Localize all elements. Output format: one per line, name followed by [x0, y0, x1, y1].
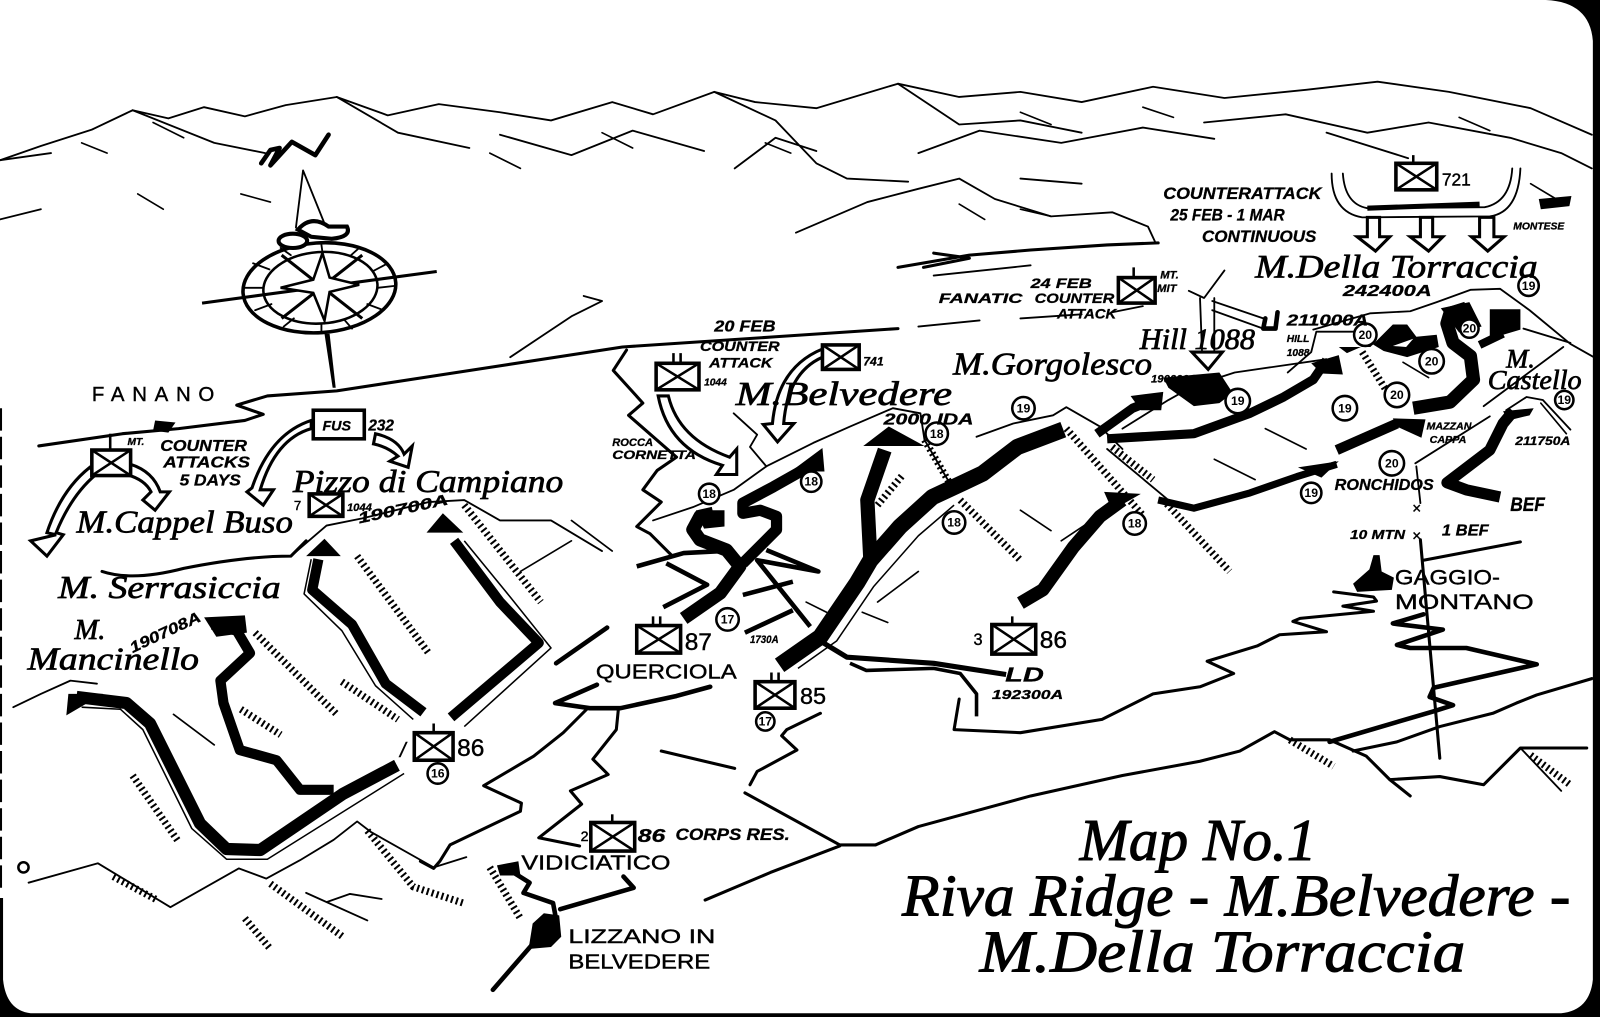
- place names and annotations: block lettering: FANATIC: [939, 291, 1023, 307]
- place names and annotations: block lettering: GAGGIO-: [1395, 566, 1500, 590]
- place names and annotations: block lettering: 1 BEF: [1442, 523, 1489, 540]
- attack arrows: Riva Ridge: [66, 513, 551, 859]
- foreground roads and mountains: [18, 540, 1592, 990]
- place names and annotations: block lettering: FANANO: [92, 384, 214, 406]
- circled objective numbers: 19: [1557, 393, 1571, 407]
- unit: 87: 87: [685, 629, 712, 656]
- compass rose: [202, 135, 437, 388]
- circled objective numbers: 18: [702, 487, 716, 501]
- place names and annotations: block lettering: ATTACKS: [162, 454, 251, 471]
- place names and annotations: block lettering: CONTINUOUS: [1202, 228, 1316, 246]
- place names: script labels: [26, 250, 1582, 676]
- circled objective numbers: 17: [721, 612, 735, 626]
- circled objective numbers: 20: [1463, 322, 1476, 336]
- place names and annotations: block lettering: COUNTERATTACK: [1163, 185, 1323, 203]
- place names and annotations: block lettering: [92, 185, 1570, 973]
- circled objective numbers: 16: [431, 767, 445, 781]
- outlined counterattack arrows: left group: [31, 420, 412, 556]
- place names and annotations: block lettering: 10 MTN: [1350, 527, 1406, 542]
- place names: script labels: M. Serrasiccia: [57, 570, 281, 605]
- place names and annotations: block lettering: 190708A: [127, 609, 204, 657]
- attack arrows: M. Gorgolesco and Della Torraccia: [1020, 302, 1534, 603]
- place names and annotations: block lettering: 242400A: [1341, 283, 1432, 300]
- place names and annotations: block lettering: QUERCIOLA: [596, 662, 737, 684]
- unit: 2/86: 86: [638, 825, 666, 846]
- background mountain ranges: [0, 82, 1592, 267]
- unit: 3/86: 3: [973, 631, 983, 649]
- place names: script labels: M.Belvedere: [734, 376, 952, 413]
- circled objective numbers: 17: [759, 715, 772, 729]
- unit: FUS 232: [313, 410, 394, 439]
- place names: script labels: Mancinello: [26, 641, 199, 676]
- place names and annotations: block lettering: 211750A: [1514, 434, 1570, 448]
- place names and annotations: block lettering: 25 FEB - 1 MAR: [1169, 206, 1285, 224]
- unit: 1/86: /: [398, 740, 408, 762]
- unit: 741: [822, 345, 884, 369]
- unit: 721: 721: [1442, 170, 1471, 190]
- place names and annotations: block lettering: 190700A: [356, 492, 450, 527]
- town marks: [153, 196, 1571, 949]
- unit: 741: 741: [863, 354, 884, 368]
- unit: 1/86: [398, 724, 484, 762]
- place names and annotations: block lettering: ×: [1412, 528, 1421, 545]
- unit: 1/86: 86: [457, 735, 484, 762]
- circled objective numbers: 19: [1304, 486, 1318, 500]
- place names and annotations: block lettering: LIZZANO IN: [568, 926, 715, 948]
- place names: script labels: M.Cappel Buso: [75, 505, 293, 540]
- unit: 2/86: 2: [581, 829, 589, 845]
- place names and annotations: block lettering: 1088: [1287, 348, 1310, 359]
- place names and annotations: block lettering: CAPPA: [1430, 435, 1466, 446]
- circled objective numbers: 20: [1359, 328, 1372, 342]
- unit: 1044 north: [656, 353, 727, 390]
- unit: FUS 232: 232: [367, 418, 394, 435]
- place names and annotations: block lettering: ATTACK: [1056, 306, 1118, 322]
- circled objective numbers: 18: [947, 516, 961, 530]
- unit: 85: 85: [800, 683, 826, 709]
- place names and annotations: block lettering: BELVEDERE: [568, 951, 710, 973]
- place names and annotations: block lettering: 5 DAYS: [180, 473, 242, 490]
- map title: Map No.1: [1079, 807, 1316, 873]
- place names and annotations: block lettering: RONCHIDOS: [1335, 477, 1435, 494]
- place names and annotations: block lettering: VIDICIATICO: [521, 852, 670, 874]
- circled objective numbers: 20: [1425, 354, 1439, 368]
- circled objective numbers: 19: [1231, 394, 1245, 408]
- place names and annotations: block lettering: CORPS RES.: [676, 826, 790, 844]
- map title: Riva Ridge - M.Belvedere -: [901, 862, 1570, 928]
- place names: script labels: Castello: [1488, 364, 1582, 395]
- place names: script labels: Hill 1088: [1139, 324, 1255, 356]
- unit: 1044 north: 1044: [704, 378, 727, 389]
- place names and annotations: block lettering: HILL: [1287, 334, 1309, 345]
- circled objective numbers: 18: [804, 475, 818, 489]
- place names and annotations: block lettering: ×: [1412, 500, 1421, 517]
- place names and annotations: block lettering: MT.: [128, 437, 144, 448]
- plain edge and valley road: [39, 265, 1143, 555]
- place names and annotations: block lettering: 211000A: [1285, 313, 1368, 330]
- place names and annotations: block lettering: MONTESE: [1513, 222, 1565, 233]
- circled objective numbers: 20: [1385, 456, 1399, 470]
- place names and annotations: block lettering: 1730A: [750, 634, 779, 646]
- outlined counterattack arrows: centre group: [658, 270, 1278, 475]
- unit: 4th: [92, 434, 131, 476]
- place names and annotations: block lettering: COUNTER: [1035, 291, 1115, 307]
- ridge lines and hachures: [13, 289, 1594, 842]
- circled objective numbers: 19: [1017, 401, 1030, 415]
- unit: 85: [755, 672, 826, 709]
- circled objective numbers: 19: [1338, 401, 1352, 415]
- place names and annotations: block lettering: ROCCA: [612, 437, 653, 449]
- circled objective numbers: 19: [1522, 279, 1536, 293]
- circled objective numbers: 18: [1128, 517, 1142, 531]
- outlined counterattack arrows: M. Della Torraccia: [1332, 168, 1520, 251]
- place names and annotations: block lettering: COUNTER: [160, 438, 247, 455]
- unit: 7/1044: 1044: [347, 502, 373, 514]
- place names and annotations: block lettering: 192300A: [992, 687, 1063, 702]
- place names and annotations: block lettering: BEF: [1510, 494, 1546, 516]
- place names and annotations: block lettering: ATTACK: [708, 355, 774, 371]
- place names and annotations: block lettering: MAZZAN: [1427, 422, 1472, 433]
- unit: Mt Mit: [1118, 267, 1155, 303]
- place names: script labels: M.: [1505, 343, 1535, 373]
- unit: FUS 232: FUS: [322, 419, 351, 435]
- place names: script labels: M.: [73, 615, 105, 646]
- unit: 3/86: [973, 616, 1067, 654]
- place names and annotations: block lettering: 20 FEB: [713, 319, 776, 336]
- unit symbols: [92, 155, 1471, 851]
- place names: script labels: M.Della Torraccia: [1254, 250, 1538, 286]
- circled objective numbers: 18: [930, 427, 944, 441]
- place names and annotations: block lettering: 2000 IDA: [882, 412, 973, 429]
- unit: 7/1044: 7: [294, 498, 301, 513]
- unit: 3/86: 86: [1040, 627, 1067, 654]
- place names and annotations: block lettering: MIT: [1157, 283, 1178, 295]
- place names: script labels: Pizzo di Campiano: [292, 464, 563, 499]
- place names and annotations: block lettering: CORNETTA: [612, 448, 696, 462]
- attack arrows: M. Belvedere: [637, 427, 1063, 716]
- circled objective numbers: 20: [1390, 388, 1404, 402]
- unit: 721: [1396, 155, 1471, 190]
- unit: 7/1044: [294, 494, 373, 516]
- unit: 2/86: [581, 814, 666, 851]
- place names and annotations: block lettering: MT.: [1160, 270, 1179, 282]
- place names and annotations: block lettering: 24 FEB: [1029, 276, 1092, 292]
- place names: script labels: M.Gorgolesco: [952, 347, 1152, 382]
- map title: [901, 807, 1570, 984]
- place names and annotations: block lettering: LD: [1005, 665, 1044, 687]
- place names and annotations: block lettering: 190000A: [1151, 374, 1197, 386]
- map title: M.Della Torraccia: [978, 918, 1465, 984]
- place names and annotations: block lettering: COUNTER: [700, 339, 780, 355]
- place names and annotations: block lettering: MONTANO: [1395, 590, 1534, 614]
- unit: 87: [637, 616, 712, 656]
- circled objective numbers: [428, 276, 1573, 784]
